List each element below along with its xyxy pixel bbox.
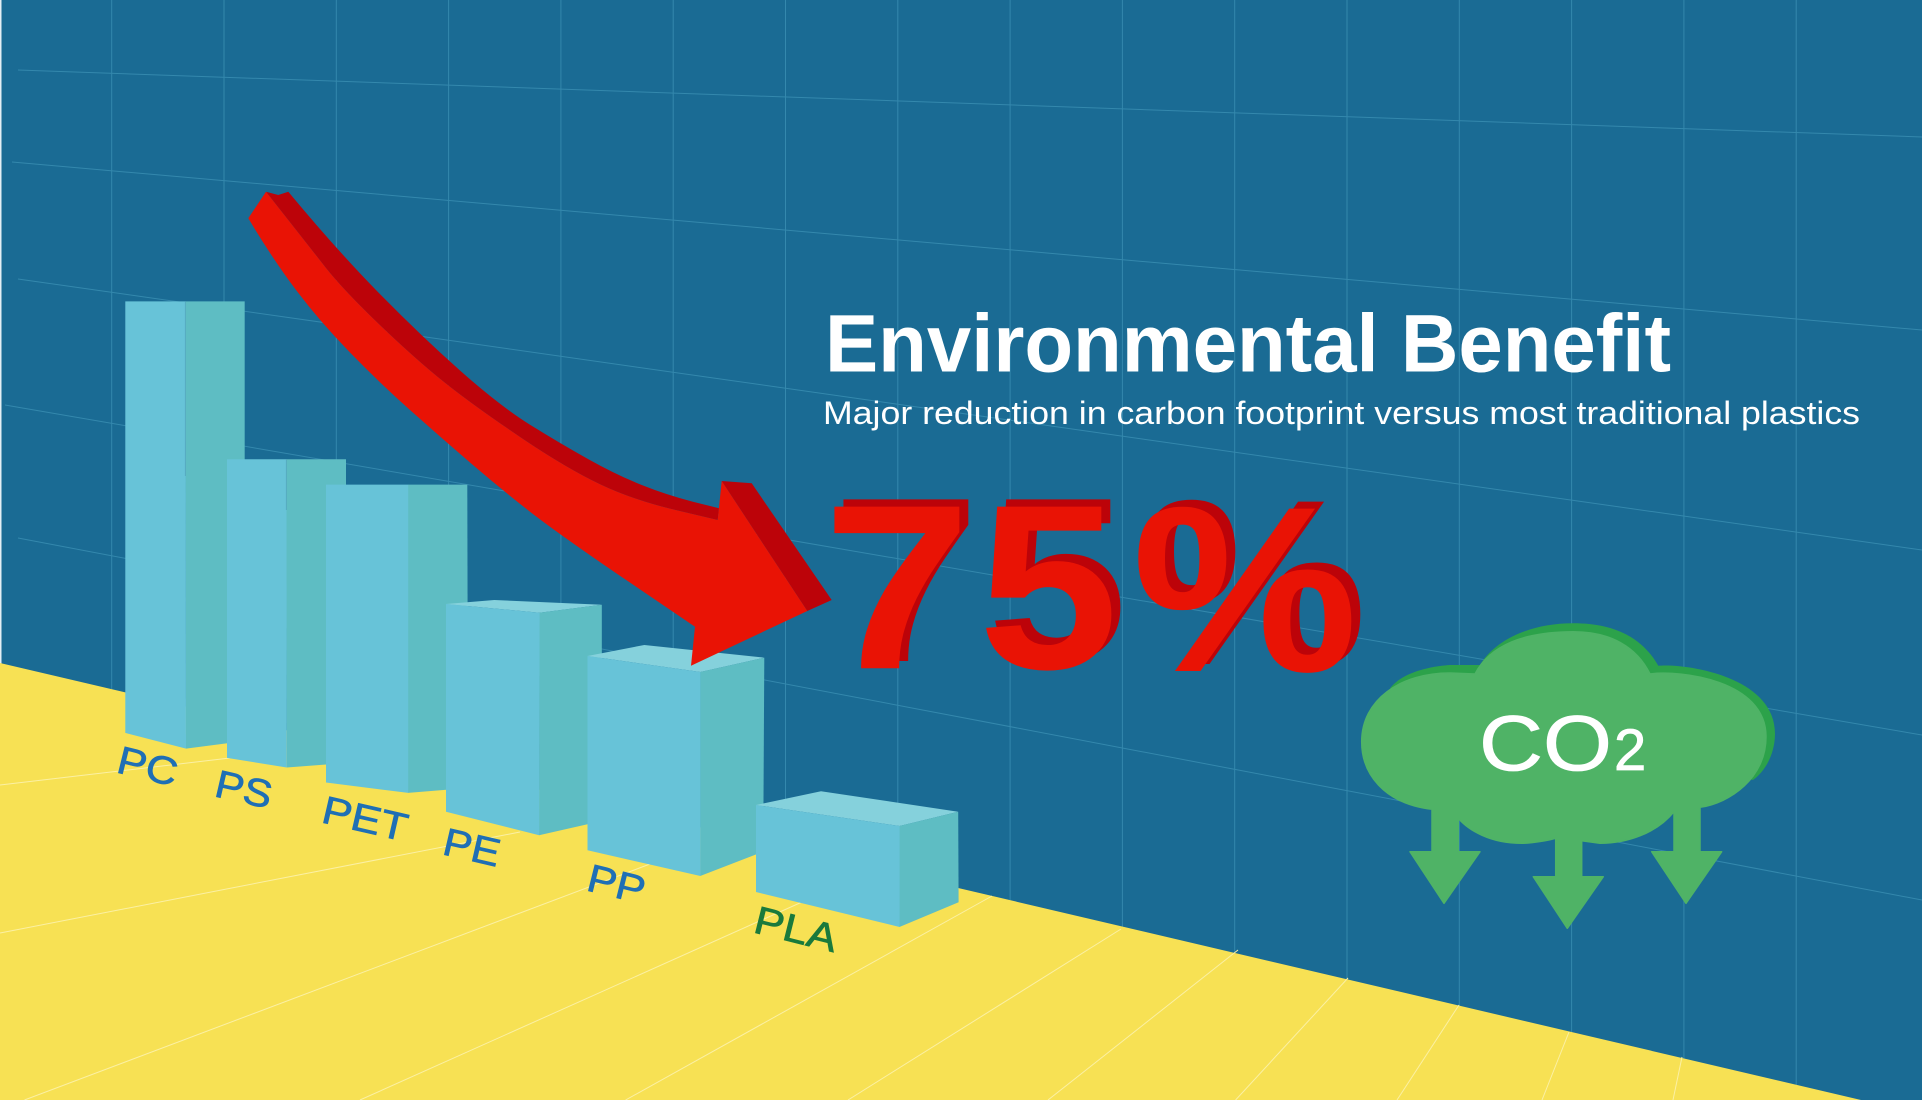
CO2 label [1479,699,1646,787]
big number 75%: % [1141,451,1367,715]
bar: PP [588,645,764,876]
label: PET: PET [318,787,412,850]
bar: PLA [756,791,959,927]
big number 75%: 7 [823,455,971,718]
big number 75%: % [1132,458,1358,722]
big number 75% [823,448,1367,722]
subtitle: Major reduction in carbon footprint versus most traditional plastics [823,395,1860,431]
big number 75%: 5 [987,448,1127,711]
icon: CO2 cloud with down arrows [1362,623,1775,928]
big number 75%: 5 [978,455,1118,718]
label: PP: PP [583,856,650,912]
CO2 label: 2 [1614,718,1646,783]
label: PC: PC [113,738,182,795]
bar: PS [227,459,346,768]
downward red arrow [248,192,832,666]
label: PLA: PLA [750,898,842,960]
label: PE: PE [439,820,505,875]
bar: PE [446,600,602,835]
big number 75%: 7 [832,448,980,711]
CO2 label: CO [1479,699,1612,787]
yellow floor [0,663,1861,1100]
title: Environmental Benefit [825,299,1671,390]
bar: PET [326,485,468,793]
label: PS: PS [211,762,277,817]
bar: PC [125,301,245,749]
